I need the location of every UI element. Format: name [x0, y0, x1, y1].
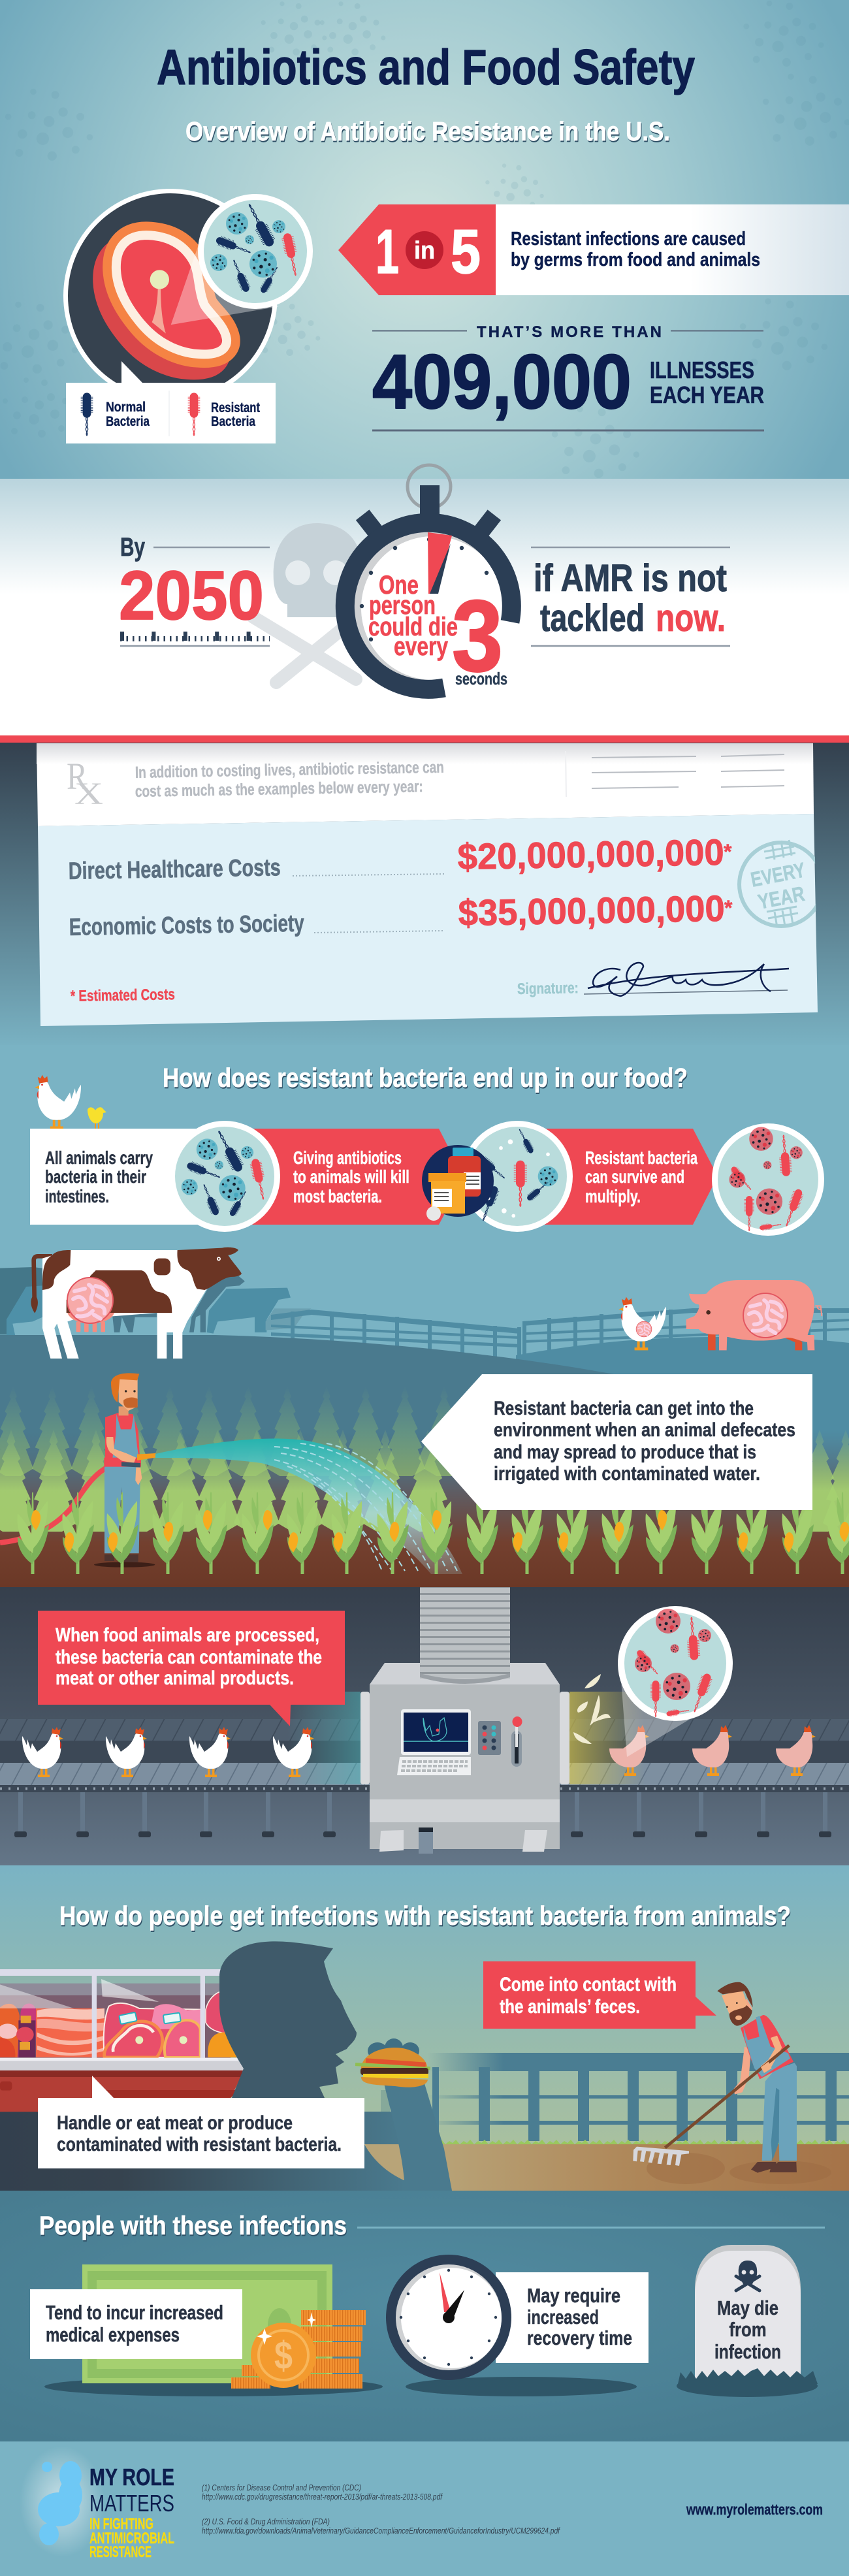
glare	[0, 1984, 74, 2008]
panel: 2050 projection	[0, 465, 849, 743]
left hill	[0, 1335, 718, 1522]
process chain: how bacteria spread	[30, 1121, 824, 1236]
icon: chick	[88, 1107, 106, 1129]
box: may require recovery	[496, 2272, 649, 2363]
logo: ANTIMICROBIAL	[89, 2530, 174, 2547]
callout: come into contact: Come into contact with	[500, 1974, 677, 1995]
stat: 409,000 illnesses: EACH YEAR	[650, 381, 764, 408]
silhouette: man eating burger	[219, 1941, 452, 2191]
heading: people with these infections: People with these infections	[39, 2212, 347, 2240]
text: may die from infection: infection	[714, 2340, 781, 2363]
machine glow left	[287, 1692, 360, 1784]
background cows	[0, 1267, 312, 1336]
text: economic costs row: Economic Costs to Society	[69, 910, 304, 941]
band: resistant bacteria survive: Resistant bacteria	[585, 1148, 697, 1168]
text: may die from infection: May die	[717, 2296, 778, 2319]
heading: how does resistant bacteria end up: How does resistant bacteria end up in our food?	[163, 1063, 688, 1093]
ground	[431, 2144, 849, 2191]
text: if AMR is not tackled now: tackled	[540, 597, 645, 639]
machine glow right	[569, 1692, 645, 1784]
text: may die from infection	[714, 2296, 781, 2363]
icon: tombstone	[678, 2245, 818, 2384]
box: may require recovery: May require	[527, 2284, 620, 2307]
icon: clock	[386, 2255, 511, 2380]
title: Antibiotics and Food Safety	[157, 40, 695, 95]
icon: bacteria circle 1	[169, 1121, 280, 1232]
icon: magnifier circle	[198, 194, 313, 309]
panel: people with these infections	[0, 2191, 849, 2441]
banner: 1 in 5: in	[414, 237, 435, 265]
callout: when food animals are processed: these bacteria can contaminate the	[56, 1647, 322, 1668]
logo: MATTERS	[89, 2490, 174, 2517]
panel: prescription background	[0, 743, 849, 1050]
text: may die from infection: from	[729, 2318, 767, 2341]
banner: 1 in 5: 5	[451, 217, 481, 287]
text: estimated costs: * Estimated Costs	[71, 986, 175, 1005]
icon: flying feathers	[573, 1674, 611, 1744]
box: all animals carry bacteria: All animals carry	[45, 1148, 153, 1168]
header panel background	[0, 0, 849, 479]
text: one person could die every: 3	[452, 579, 503, 692]
icon: farmer watering	[94, 1373, 155, 1568]
icon: skull and crossbones	[736, 2261, 760, 2291]
conveyor legs	[18, 1792, 827, 1831]
callout: when food animals are processed	[38, 1611, 345, 1726]
icon: burger	[355, 2048, 430, 2087]
shadow under tombstone	[677, 2375, 818, 2397]
text: Rx: R	[67, 755, 88, 797]
box: all animals carry bacteria	[30, 1129, 226, 1225]
logo	[20, 2446, 174, 2561]
meat cuts	[104, 1991, 238, 2057]
farmland hills and fences	[0, 1267, 849, 1522]
icon: chicken intestines	[636, 1321, 652, 1337]
stat: 409,000 illnesses: 409,000	[372, 339, 632, 425]
references: http://www.fda.gov/downloads/AnimalVeterinary/GuidanceComplianceEnforcement/GuidanceforIndustry/UCM299624.pdf	[202, 2526, 560, 2536]
shadow under money	[44, 2377, 383, 2396]
icon: pig intestines	[743, 1293, 788, 1338]
box: all animals carry bacteria: bacteria in their	[45, 1167, 146, 1187]
signature: Signature:	[517, 979, 579, 998]
callout: bacteria spread to environment: Resistant bacteria can get into the	[494, 1398, 754, 1419]
box: tend to incur: medical expenses	[46, 2323, 180, 2346]
meat display case	[0, 1969, 244, 2112]
right hill	[516, 1337, 849, 1522]
text: economic costs row: $35,000,000,000	[458, 888, 725, 933]
icon: field chicken	[618, 1297, 666, 1350]
text: economic costs row: *	[724, 896, 733, 920]
text: seconds: seconds	[455, 669, 507, 688]
fence	[381, 2053, 849, 2144]
stat: 409,000 illnesses	[372, 323, 764, 430]
panel: footer	[0, 2441, 849, 2576]
bacon	[36, 2008, 104, 2057]
right fence	[522, 1308, 849, 1355]
band: resistant bacteria survive	[542, 1129, 718, 1225]
band: giving antibiotics	[248, 1129, 455, 1225]
callout: bacteria spread to environment	[421, 1374, 812, 1510]
text: 2050: 2050	[119, 557, 264, 634]
callout: come into contact	[483, 1961, 716, 2029]
white chickens	[22, 1727, 314, 1777]
text: direct healthcare costs row: $20,000,000,000	[457, 831, 724, 877]
icon: meat badge with magnifier	[63, 189, 313, 403]
callout: bacteria spread to environment: environment when an animal defecates	[494, 1419, 795, 1441]
text: By: By	[120, 533, 146, 562]
water spray	[155, 1439, 462, 1574]
icon: processing machine	[360, 1587, 569, 1854]
box: tend to incur: Tend to incur increased	[46, 2301, 223, 2324]
logo: IN FIGHTING	[89, 2515, 153, 2533]
logo text: MY ROLE	[89, 2464, 174, 2490]
control panel	[478, 1721, 501, 1755]
callout: handle or eat meat: contaminated with resistant bacteria.	[57, 2134, 342, 2155]
soil field	[0, 1430, 849, 1587]
text: prescription intro	[135, 758, 444, 801]
icon: banknote	[82, 2264, 332, 2383]
panel: how people get infections background	[0, 1865, 849, 2146]
box: may require recovery: increased	[527, 2306, 599, 2328]
stat: 409,000 illnesses: THAT’S MORE THAN	[477, 323, 662, 341]
stat: 409,000 illnesses: ILLNESSES	[650, 357, 754, 383]
icon: normal bacterium	[86, 397, 88, 436]
text: one person could die every	[368, 571, 503, 692]
icon: steak	[111, 240, 279, 362]
corn rows background	[0, 1386, 849, 1532]
panel: food chain background	[0, 1045, 849, 1587]
lever	[511, 1716, 522, 1767]
text: Rx	[67, 755, 103, 811]
icon: fingers	[368, 2038, 419, 2059]
text: Rx: X	[74, 777, 103, 811]
icon: bacteria circle 2	[462, 1121, 573, 1232]
icon: stopwatch	[345, 465, 511, 692]
icon: skull	[274, 523, 363, 617]
decorative faded bacteria	[0, 1, 849, 478]
callout: come into contact: the animals’ feces.	[500, 1996, 640, 2018]
plucked chickens	[609, 1725, 816, 1776]
text: direct healthcare costs row	[68, 831, 732, 884]
icon: cow intestines	[67, 1278, 113, 1323]
box: tend to incur	[30, 2289, 242, 2359]
subtitle: Overview of Antibiotic Resistance in the U.S.	[185, 116, 670, 146]
icon: resistant bacterium	[193, 397, 195, 436]
band: resistant bacteria survive: multiply.	[585, 1186, 641, 1206]
text: prescription intro: In addition to costing lives, antibiotic resistance can	[135, 758, 444, 782]
text: resistant bacteria: Resistant	[211, 400, 260, 415]
legend: Bacteria	[211, 414, 255, 429]
stamp: every year: YEAR	[756, 882, 807, 914]
hose	[0, 1463, 118, 1543]
grass	[678, 2368, 818, 2384]
band: giving antibiotics: most bacteria.	[293, 1186, 382, 1206]
icon: resistant bacteria magnifier	[618, 1606, 733, 1721]
conveyor belt	[0, 1719, 849, 1837]
references: (2) U.S. Food & Drug Administration (FDA)	[202, 2517, 330, 2526]
stamp: every year	[739, 840, 823, 927]
callout: when food animals are processed: When food animals are processed,	[56, 1624, 319, 1646]
banner: 1 in 5: by germs from food and animals	[511, 250, 760, 270]
text: direct healthcare costs row: Direct Healthcare Costs	[68, 854, 281, 884]
icon: coin stack	[231, 2310, 366, 2389]
text: prescription intro: cost as much as the examples below every year:	[135, 777, 423, 801]
text: one person could die every: person	[369, 591, 436, 620]
ruler	[120, 636, 270, 639]
legend: Bacteria	[106, 414, 150, 429]
text: resistant infections statement: Resistant infections are caused	[511, 229, 746, 250]
references	[202, 2483, 560, 2536]
callout: handle or eat meat: Handle or eat meat or produce	[57, 2112, 293, 2134]
references: (1) Centers for Disease Control and Prevention (CDC)	[202, 2483, 361, 2492]
icon: coin stack: $	[274, 2334, 293, 2377]
callout: bacteria spread to environment: irrigated with contaminated water.	[494, 1463, 760, 1485]
logo: RESISTANCE	[89, 2543, 152, 2561]
text: direct healthcare costs row: *	[724, 840, 732, 863]
banner: 1 in 5	[338, 204, 849, 295]
box: all animals carry bacteria: intestines.	[45, 1186, 109, 1206]
band: resistant bacteria survive: can survive and	[585, 1167, 684, 1187]
stamp: every year: EVERY	[748, 858, 807, 892]
text: if AMR is not tackled now: if AMR is not	[534, 557, 727, 600]
shadow under clock	[406, 2377, 637, 2396]
callout: handle or eat meat	[38, 2076, 364, 2168]
callout: when food animals are processed: meat or other animal products.	[56, 1667, 294, 1689]
callout: bacteria spread to environment: and may spread to produce that is	[494, 1441, 756, 1463]
icon: hen on box	[35, 1075, 81, 1129]
icon: pig	[686, 1280, 822, 1350]
beam of magnifier	[620, 1672, 692, 1757]
text: one person could die every: every	[394, 632, 449, 661]
panel: prescription pad	[37, 743, 823, 1026]
corn front row	[17, 1492, 849, 1574]
legend	[66, 383, 276, 443]
text: normal bacteria: Normal	[106, 400, 146, 415]
icon: antibiotic pills	[422, 1145, 494, 1221]
text: one person could die every: could die	[368, 613, 458, 641]
band: giving antibiotics: Giving antibiotics	[293, 1148, 402, 1168]
keyboard	[397, 1757, 471, 1775]
soil shading	[647, 2153, 831, 2184]
icon: bacteria circle 3	[712, 1123, 824, 1236]
icon: farmer raking	[633, 1982, 797, 2173]
monitor	[401, 1709, 471, 1755]
signature	[517, 963, 789, 998]
ground crescent	[364, 2144, 424, 2182]
dark foreground	[0, 2112, 405, 2191]
text: if AMR is not tackled now	[531, 547, 730, 646]
icon: cow	[31, 1248, 242, 1359]
text: if AMR is not tackled now: now.	[656, 597, 726, 639]
references: http://www.cdc.gov/drugresistance/threat-report-2013/pdf/ar-threats-2013-508.pdf	[202, 2492, 443, 2502]
left fence	[271, 1310, 521, 1360]
banner: 1 in 5: 1	[376, 217, 399, 287]
icon: crossbones	[253, 617, 356, 683]
text: one person could die every: One	[379, 571, 419, 600]
band: giving antibiotics: to animals will kill	[293, 1167, 409, 1187]
box: may require recovery: recovery time	[527, 2326, 632, 2349]
panel: processing plant background	[0, 1587, 849, 1865]
text: economic costs row	[69, 888, 733, 941]
sausages	[0, 2003, 37, 2057]
